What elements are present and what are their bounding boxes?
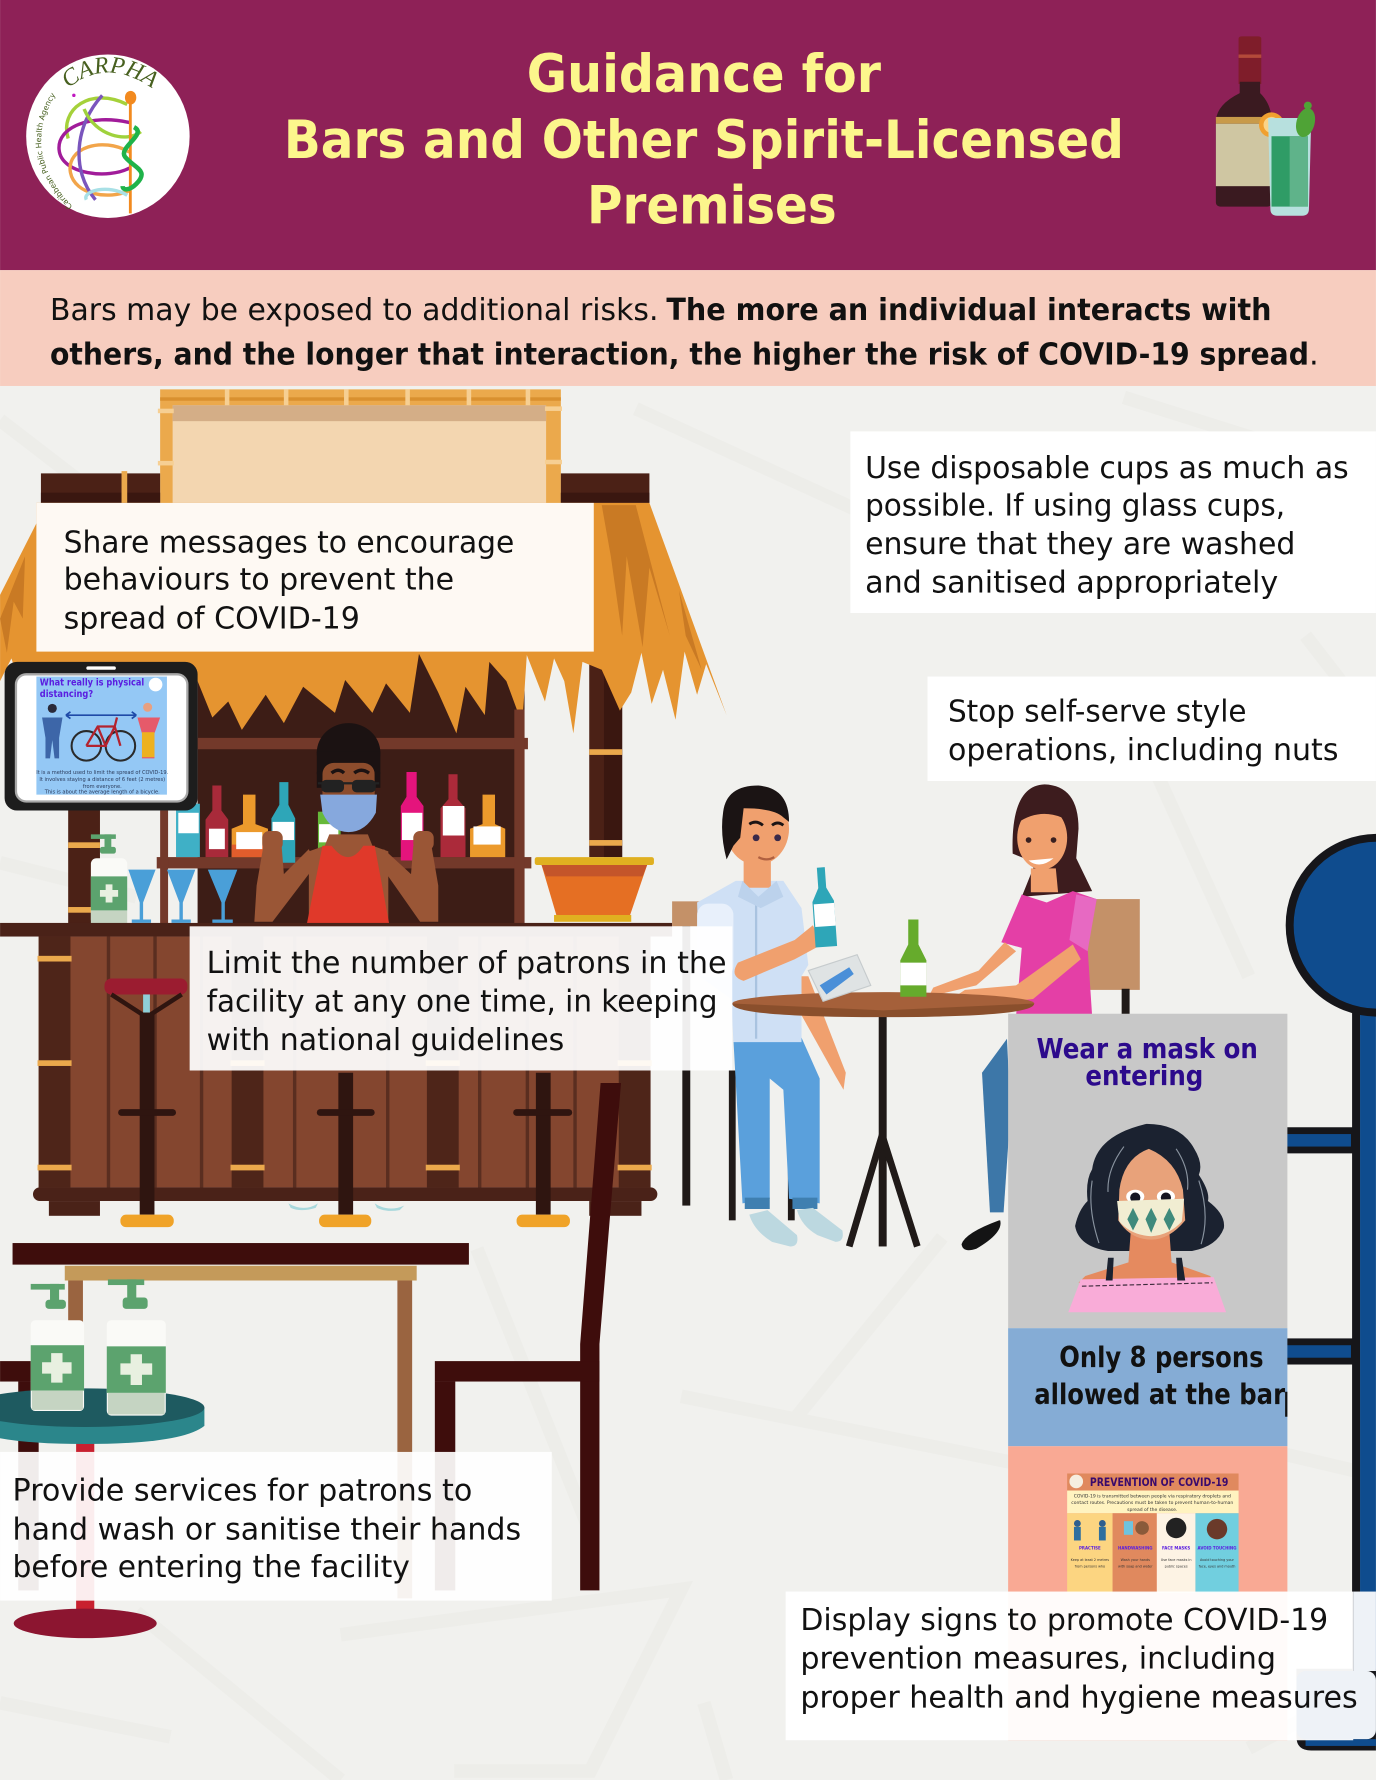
- cocktail glasses: [128, 870, 237, 923]
- sign: prevention poster: [1008, 1446, 1287, 1740]
- callout: hand sanitising: hand wash or sanitise their hands: [13, 1512, 521, 1547]
- poster columns: with soap and water: [1118, 1565, 1153, 1569]
- man: [697, 786, 846, 1246]
- poster columns: [1067, 1513, 1239, 1593]
- poster intro: spread of the disease.: [1127, 1507, 1177, 1513]
- figure: man: [42, 704, 63, 758]
- illustration: seated man and woman at table: [672, 784, 1140, 1250]
- poster columns: Wash your hands: [1121, 1558, 1150, 1562]
- shoes behind counter: [288, 1203, 404, 1211]
- poster header: [1067, 1473, 1239, 1491]
- callout: disposable cups: [850, 431, 1376, 613]
- counter: [0, 923, 672, 1216]
- callout: hand sanitising: Provide services for patrons to: [13, 1474, 472, 1509]
- callout: disposable cups: and sanitised appropriately: [865, 566, 1278, 601]
- illustration: bar hut: [0, 389, 727, 1227]
- roof beams: [41, 471, 649, 503]
- plant pot: [535, 857, 654, 922]
- sign: only 8 persons: [1008, 1328, 1287, 1446]
- woman wearing patterned mask: [1068, 1124, 1226, 1312]
- callout: disposable cups: Use disposable cups as much as: [865, 451, 1349, 486]
- intro text band: .: [1309, 337, 1319, 372]
- cafe table: [732, 992, 1034, 1246]
- sign: only 8 persons: Only 8 persons: [1059, 1341, 1264, 1374]
- callout: share messages: [36, 503, 594, 652]
- title: Premises: [587, 177, 837, 237]
- tablet: physical distancing poster: It is a method used to limit the spread of COVID-19.: [36, 770, 169, 776]
- callout: share messages: Share messages to encourage: [64, 525, 514, 560]
- bicycle: [72, 717, 135, 761]
- mask packet: [808, 955, 871, 1001]
- table: [13, 1243, 469, 1598]
- intro text band: Bars may be exposed to additional risks.: [50, 293, 658, 328]
- poster columns: AVOID TOUCHING: [1198, 1546, 1236, 1551]
- bottles on shelf: [176, 772, 505, 863]
- sanitiser on bar: [91, 834, 127, 925]
- teal bottle: [810, 867, 837, 947]
- callout: display signs: Display signs to promote COVID-19: [800, 1603, 1328, 1638]
- callout: hand sanitising: [0, 1452, 552, 1601]
- callout: limit patrons: with national guidelines: [207, 1023, 564, 1058]
- woman's chair: [1084, 899, 1140, 1016]
- icon: CARPHA logo: [26, 54, 190, 218]
- tablet: physical distancing poster: This is about the average length of a bicycle.: [44, 790, 160, 796]
- callout: stop self-serve: Stop self-serve style: [948, 694, 1247, 729]
- sign heading: [1037, 1034, 1258, 1092]
- side table with sanitisers: [0, 1279, 204, 1638]
- poster header: PREVENTION OF COVID-19: [1090, 1475, 1228, 1489]
- sign heading: entering: [1085, 1061, 1203, 1092]
- sign: only 8 persons: allowed at the bar: [1034, 1378, 1285, 1411]
- callout: limit patrons: Limit the number of patrons in the: [207, 946, 727, 981]
- poster columns: face, eyes and mouth: [1199, 1565, 1235, 1569]
- callout: disposable cups: possible. If using glass cups,: [865, 488, 1285, 523]
- callout: disposable cups: ensure that they are washed: [865, 527, 1295, 562]
- sanitiser bottle right: [107, 1279, 166, 1416]
- title: [284, 45, 1124, 237]
- callout: hand sanitising: before entering the facility: [13, 1550, 410, 1585]
- tablet: physical distancing poster: It involves staying a distance of 6 feet (2 metres): [39, 777, 165, 783]
- shelves: [157, 710, 531, 925]
- callout: stop self-serve: operations, including nuts: [948, 733, 1338, 768]
- callout: share messages: behaviours to prevent the: [64, 563, 454, 598]
- intro text band: The more an individual interacts with: [666, 293, 1271, 328]
- icon: CARPHA logo: Caribbean Public Health Agency: [36, 92, 72, 209]
- callout: display signs: proper health and hygiene measures: [800, 1680, 1358, 1715]
- poster intro: contact routes. Precautions must be taken to prevent human-to-human: [1071, 1500, 1233, 1506]
- intro text band: others, and the longer that interaction, the higher the risk of COVID-19 spread: [50, 337, 1309, 372]
- table and chair: [0, 1083, 621, 1598]
- sanitiser bottle left: [31, 1284, 84, 1411]
- chair: [0, 1083, 621, 1590]
- icon: CARPHA logo: CARPHA: [64, 57, 157, 88]
- header band: [0, 0, 1376, 270]
- tablet: physical distancing poster: distancing?: [40, 689, 93, 700]
- poster columns: PRACTISE: [1079, 1546, 1101, 1551]
- poster columns: public spaces: [1165, 1565, 1188, 1569]
- callout: share messages: spread of COVID-19: [64, 601, 360, 636]
- sign: wear a mask: [1008, 1014, 1287, 1328]
- illustration: blue stick figure sign: [1283, 838, 1376, 1750]
- title: Guidance for: [527, 45, 881, 105]
- poster columns: HANDWASHING: [1118, 1546, 1153, 1551]
- callout: limit patrons: [190, 926, 732, 1070]
- callout: limit patrons: facility at any one time, in keeping: [207, 984, 718, 1019]
- figure: woman: [137, 703, 160, 758]
- poster intro: COVID-19 is transmitted between people via respiratory droplets and: [1074, 1493, 1231, 1499]
- thatch shading: [0, 505, 702, 670]
- poster columns: FACE MASKS: [1162, 1546, 1190, 1551]
- green bottle: [900, 920, 926, 997]
- woman: [929, 784, 1097, 1016]
- bartender: [254, 723, 438, 925]
- man's chair: [672, 901, 795, 1220]
- callout: display signs: prevention measures, including: [800, 1642, 1276, 1677]
- poster columns: Use face masks in: [1161, 1558, 1192, 1562]
- callout: stop self-serve: [928, 677, 1376, 781]
- back wall of hut: [198, 647, 525, 926]
- icon: bottle and cocktail: [1216, 36, 1318, 216]
- left post: [68, 795, 100, 925]
- poster columns: Keep at least 2 metres: [1071, 1558, 1109, 1562]
- title: Bars and Other Spirit-Licensed: [284, 111, 1124, 171]
- callout: display signs: [786, 1592, 1376, 1740]
- intro text band: [0, 270, 1376, 386]
- banner frame: [158, 389, 562, 513]
- poster columns: from persons who: [1075, 1565, 1105, 1569]
- woman's leg and shoe: [962, 1039, 1010, 1250]
- tablet: physical distancing poster: from everyone.: [83, 784, 122, 790]
- tablet: physical distancing poster: What really is physical: [40, 678, 144, 689]
- poster intro: [1067, 1491, 1239, 1513]
- thatch roof: [0, 503, 727, 733]
- sign heading: Wear a mask on: [1037, 1034, 1258, 1065]
- right post: [589, 503, 622, 857]
- distance arrow: [66, 712, 136, 719]
- poster columns: Avoid touching your: [1200, 1558, 1235, 1562]
- tablet: physical distancing poster: [5, 662, 198, 811]
- bar stools: [105, 979, 572, 1227]
